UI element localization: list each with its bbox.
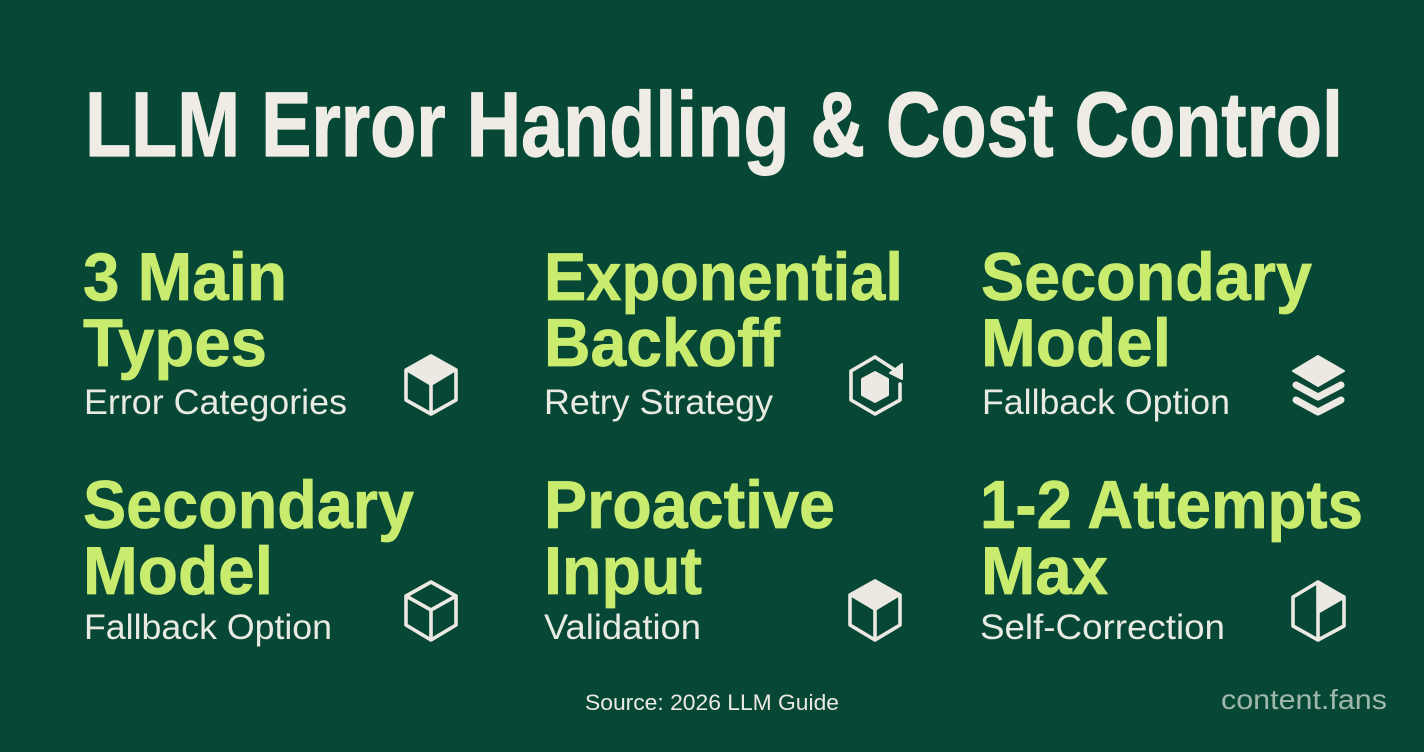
heading: 3 Main Types: 3 Main	[83, 239, 287, 315]
heading: Proactive Input: Input	[544, 533, 702, 609]
heading: Secondary Model: Secondary	[981, 239, 1312, 315]
label: Retry Strategy: Retry Strategy	[544, 383, 773, 422]
heading: 1-2 Attempts Max	[980, 467, 1363, 609]
icon: hexagon retry arrow	[851, 357, 902, 414]
panel: secondary model bottom	[83, 467, 456, 647]
label: Self-Correction: Self-Correction	[980, 608, 1225, 647]
label: Error Categories: Error Categories	[84, 383, 347, 422]
icon: solid-top cube	[406, 356, 456, 414]
label: Fallback Option: Fallback Option	[84, 608, 332, 647]
heading: 3 Main Types	[83, 239, 287, 381]
icon: half-filled hexagon	[1293, 582, 1344, 640]
heading: Secondary Model: Model	[981, 305, 1171, 381]
label: Fallback Option: Fallback Option	[982, 383, 1230, 422]
icon: outline cube	[406, 582, 456, 640]
heading: Secondary Model: Model	[83, 533, 273, 609]
heading: 1-2 Attempts Max: Max	[981, 533, 1108, 609]
panel: secondary model top	[981, 239, 1344, 422]
panel: 3 main types	[83, 239, 456, 422]
watermark: content.fans	[1221, 684, 1387, 715]
heading: Proactive Input: Proactive	[544, 467, 835, 543]
source note: Source: 2026 LLM Guide	[585, 690, 839, 715]
heading: Secondary Model: Secondary	[83, 467, 414, 543]
heading: 1-2 Attempts Max: 1-2 Attempts	[980, 467, 1363, 543]
panel: exponential backoff	[544, 239, 903, 422]
heading: 3 Main Types: Types	[83, 305, 267, 381]
heading: Exponential Backoff: Backoff	[544, 305, 780, 381]
label: Validation: Validation	[544, 608, 701, 647]
heading: Exponential Backoff: Exponential	[544, 239, 903, 315]
heading: Proactive Input	[544, 467, 835, 609]
heading: Secondary Model	[981, 239, 1312, 381]
icon: solid-top cube	[850, 581, 900, 640]
icon: stacked layers	[1293, 356, 1344, 412]
heading: Secondary Model	[83, 467, 414, 609]
panel: proactive input	[544, 467, 900, 647]
panel: attempts max	[980, 467, 1363, 647]
heading: Exponential Backoff	[544, 239, 903, 381]
